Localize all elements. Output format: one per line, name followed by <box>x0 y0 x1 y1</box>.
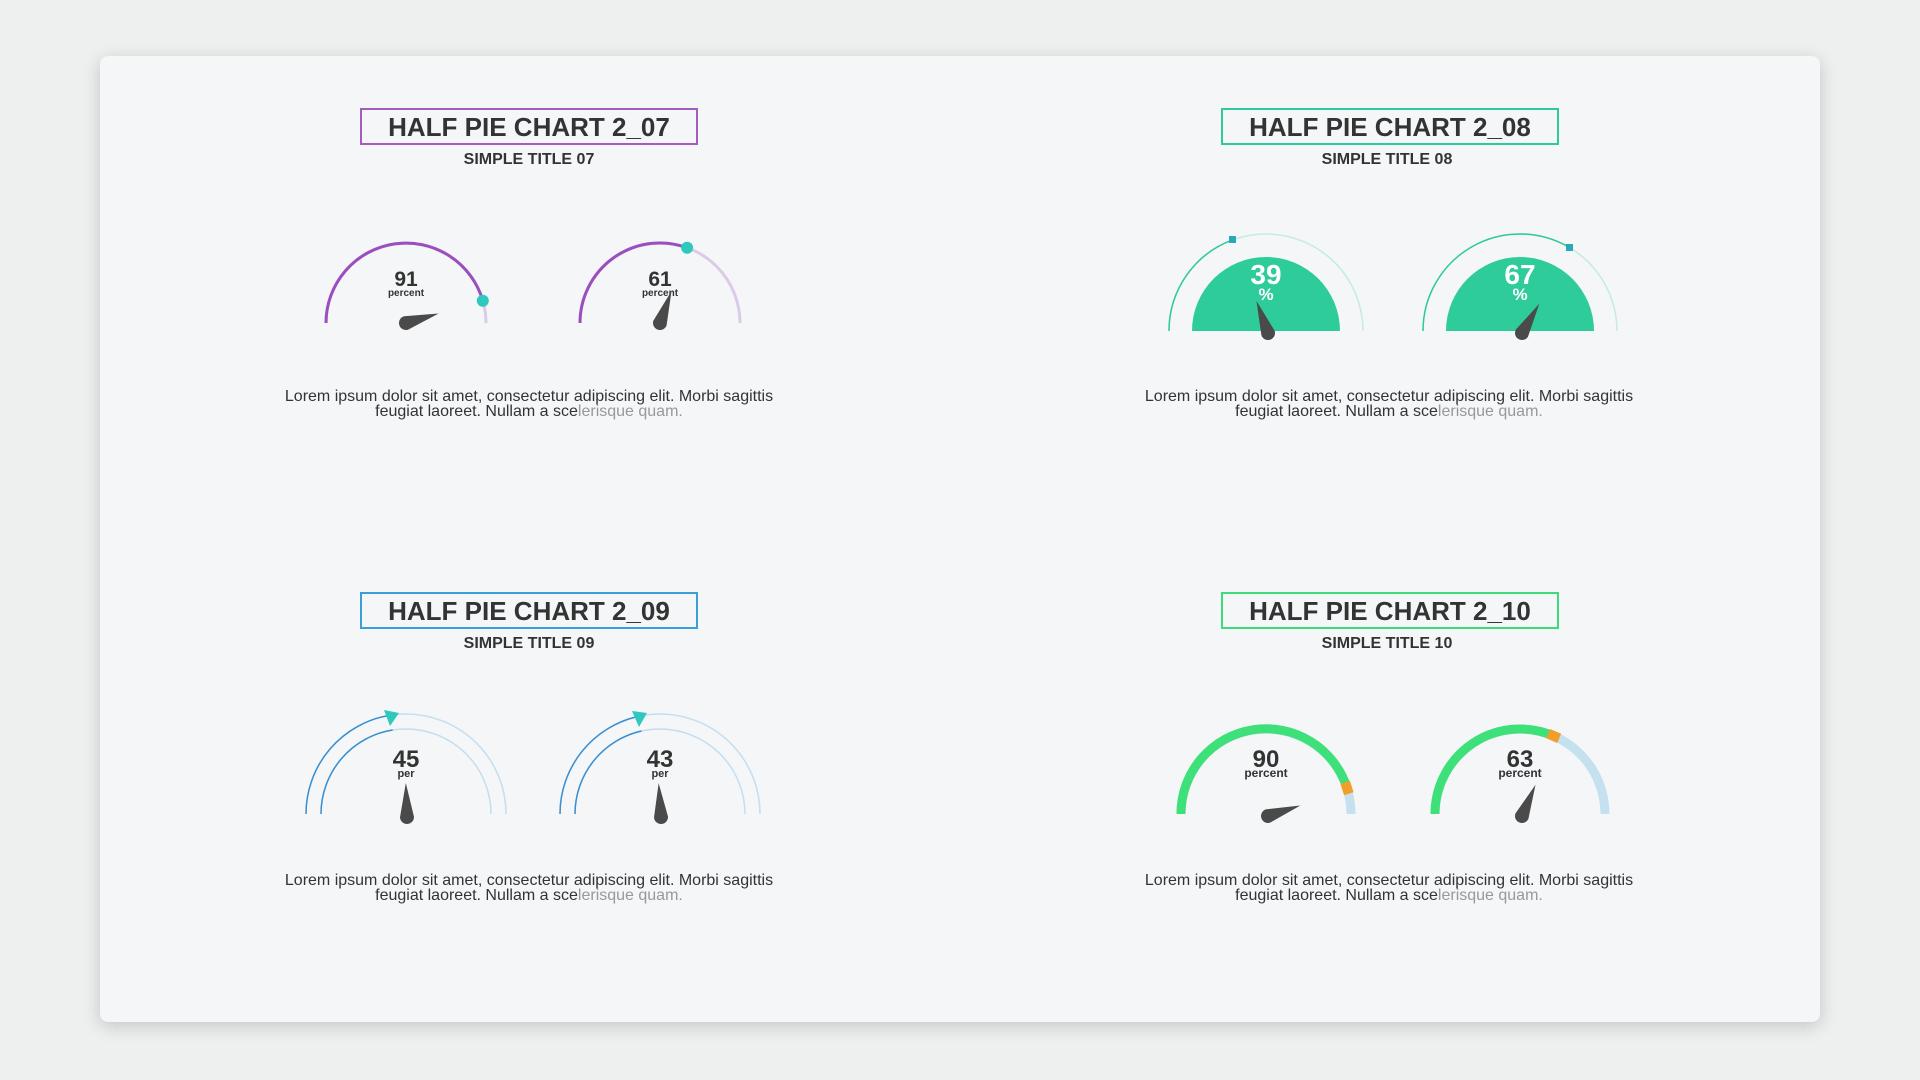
gauge 10a: 90 <box>1181 729 1354 825</box>
gauge 10b: 63: percent <box>1498 766 1542 780</box>
gauge 08b: 67: 67 <box>1504 259 1536 290</box>
gauge 08a: 39: 39 <box>1250 259 1282 290</box>
gauge 07b: 61: 61 <box>648 268 672 291</box>
gauge 08b: 67 <box>1423 234 1617 343</box>
gauge 07a: 91 <box>326 243 489 332</box>
gauge 10a: 90: percent <box>1244 766 1288 780</box>
gauge 10b: 63 <box>1435 729 1605 825</box>
gauge 07a: 91: percent <box>388 288 425 299</box>
subtitle 10: SIMPLE TITLE 10 <box>1322 635 1452 652</box>
body text 07: Lorem ipsum dolor sit amet, consectetur adipiscing elit. Morbi sagittis feugiat laoreet. Nullam a scelerisque quam. <box>285 388 773 420</box>
gauge 07b: 61 <box>580 242 740 332</box>
title: chart 2_10: HALF PIE CHART 2_10 <box>1249 596 1531 626</box>
gauge 09b: 43: per <box>651 768 669 780</box>
gauge 10b: 63: 63 <box>1507 746 1533 773</box>
body text 08: Lorem ipsum dolor sit amet, consectetur adipiscing elit. Morbi sagittis feugiat laoreet. Nullam a scelerisque quam. <box>1145 388 1633 420</box>
gauge 09a: 45 <box>306 710 506 824</box>
gauge 10a: 90: 90 <box>1253 746 1279 773</box>
subtitle 08: SIMPLE TITLE 08 <box>1322 151 1452 168</box>
title: chart 2_08: HALF PIE CHART 2_08 <box>1249 112 1531 142</box>
gauge 07b: 61: percent <box>642 288 679 299</box>
gauge 08a: 39: % <box>1258 285 1274 304</box>
gauge 07a: 91: 91 <box>394 268 418 291</box>
gauge 09a: 45: per <box>397 768 415 780</box>
gauge 08a: 39 <box>1169 234 1363 342</box>
title: chart 2_10 <box>1221 592 1559 629</box>
gauge 09b: 43: 43 <box>647 746 673 773</box>
subtitle 07: SIMPLE TITLE 07 <box>464 151 594 168</box>
body text 10: Lorem ipsum dolor sit amet, consectetur adipiscing elit. Morbi sagittis feugiat laoreet. Nullam a scelerisque quam. <box>1145 872 1633 904</box>
subtitle 09: SIMPLE TITLE 09 <box>464 635 594 652</box>
gauge 09a: 45: 45 <box>393 746 419 773</box>
gauge 09b: 43 <box>560 711 760 824</box>
title: chart 2_08 <box>1221 108 1559 145</box>
body text 09: Lorem ipsum dolor sit amet, consectetur adipiscing elit. Morbi sagittis feugiat laoreet. Nullam a scelerisque quam. <box>285 872 773 904</box>
gauge 08b: 67: % <box>1512 285 1528 304</box>
title: chart 2_09 <box>360 592 698 629</box>
title: chart 2_07: HALF PIE CHART 2_07 <box>388 112 670 142</box>
title: chart 2_09: HALF PIE CHART 2_09 <box>388 596 670 626</box>
title: chart 2_07 <box>360 108 698 145</box>
